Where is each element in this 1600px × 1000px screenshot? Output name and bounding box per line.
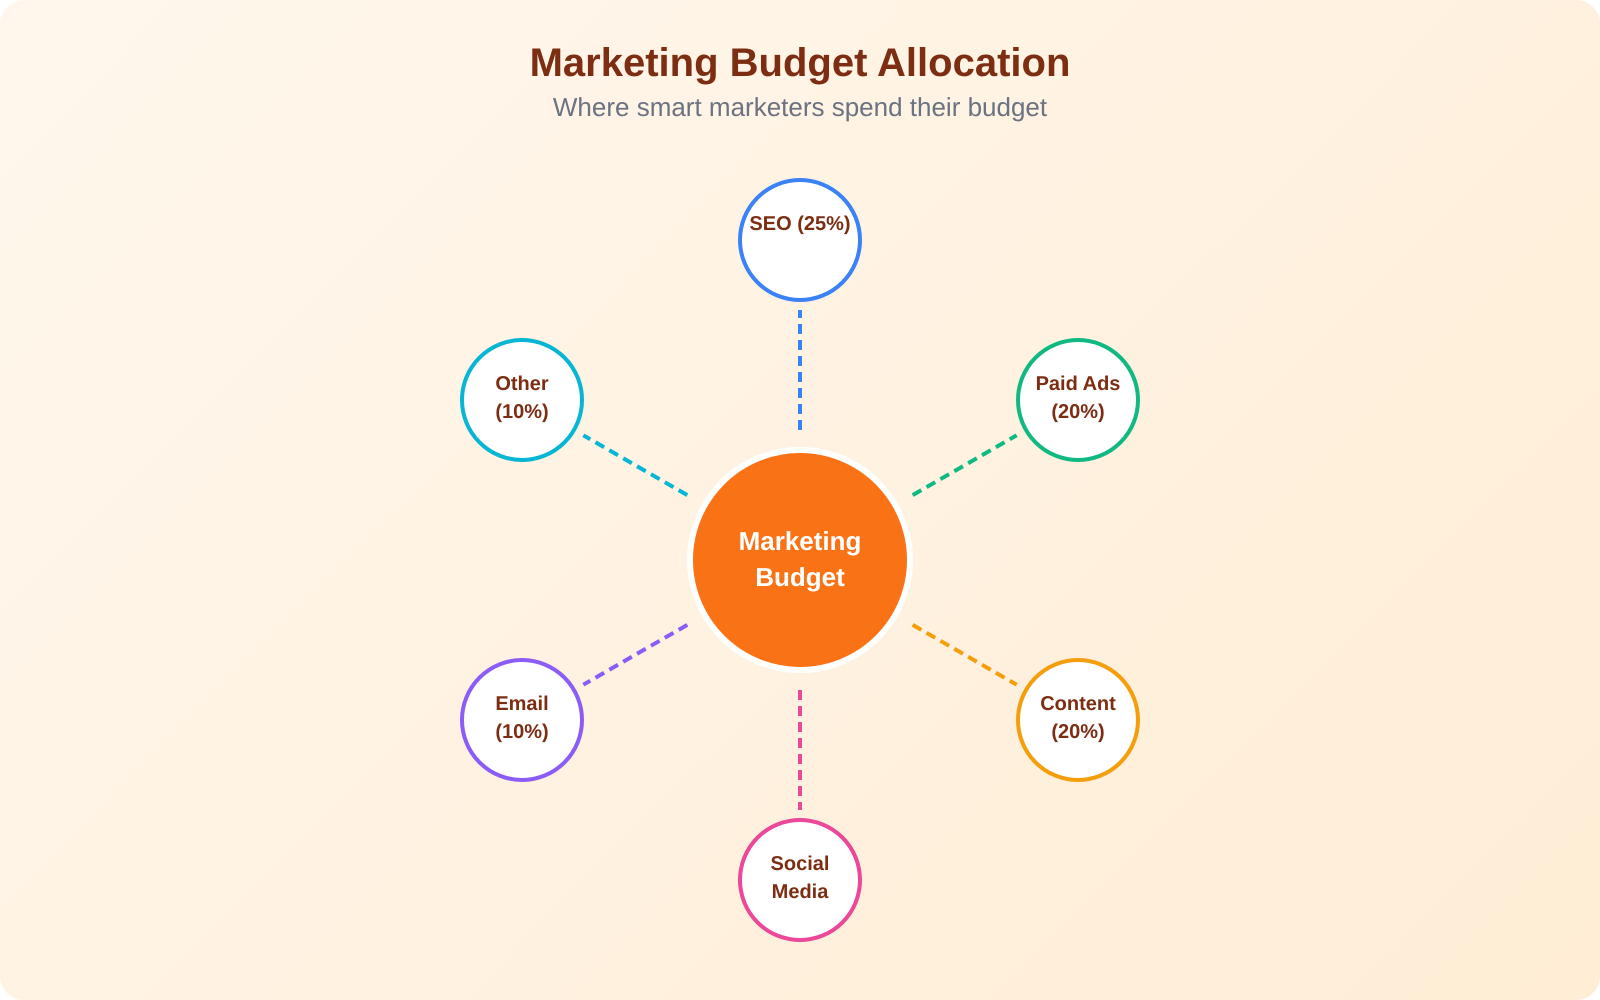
node: Email 10%: (10%) (495, 721, 549, 743)
connector: Social Media (798, 690, 802, 810)
node: Paid Ads 20%: Paid Ads (1036, 373, 1120, 395)
radial diagram (462, 180, 1138, 940)
node: Other 10%: (10%) (495, 401, 549, 423)
node: Social Media: Media (772, 881, 829, 903)
center node: Marketing Budget: Budget (755, 562, 845, 592)
connector: SEO (798, 310, 802, 430)
connector: Content (913, 625, 1017, 685)
connector: Paid Ads (913, 435, 1017, 495)
node: Social Media (740, 820, 860, 940)
node: Content 20% (1018, 660, 1138, 780)
connector: Other (583, 435, 687, 495)
node: Social Media: Social (771, 853, 829, 875)
connector: Email (583, 625, 687, 685)
node: Content 20%: Content (1040, 693, 1116, 715)
node: SEO 25%: SEO (25%) (749, 213, 851, 235)
node: Other 10%: Other (495, 373, 549, 395)
node: SEO 25% (740, 180, 860, 300)
node: Email 10% (462, 660, 582, 780)
node: Paid Ads 20%: (20%) (1051, 401, 1105, 423)
title: Marketing Budget Allocation (530, 41, 1070, 85)
center node: Marketing Budget (690, 450, 910, 670)
node: Content 20%: (20%) (1051, 721, 1105, 743)
node: Paid Ads 20% (1018, 340, 1138, 460)
subtitle: Where smart marketers spend their budget (553, 92, 1048, 122)
node: Email 10%: Email (495, 693, 549, 715)
center node: Marketing Budget: Marketing (739, 526, 861, 556)
node: Other 10% (462, 340, 582, 460)
